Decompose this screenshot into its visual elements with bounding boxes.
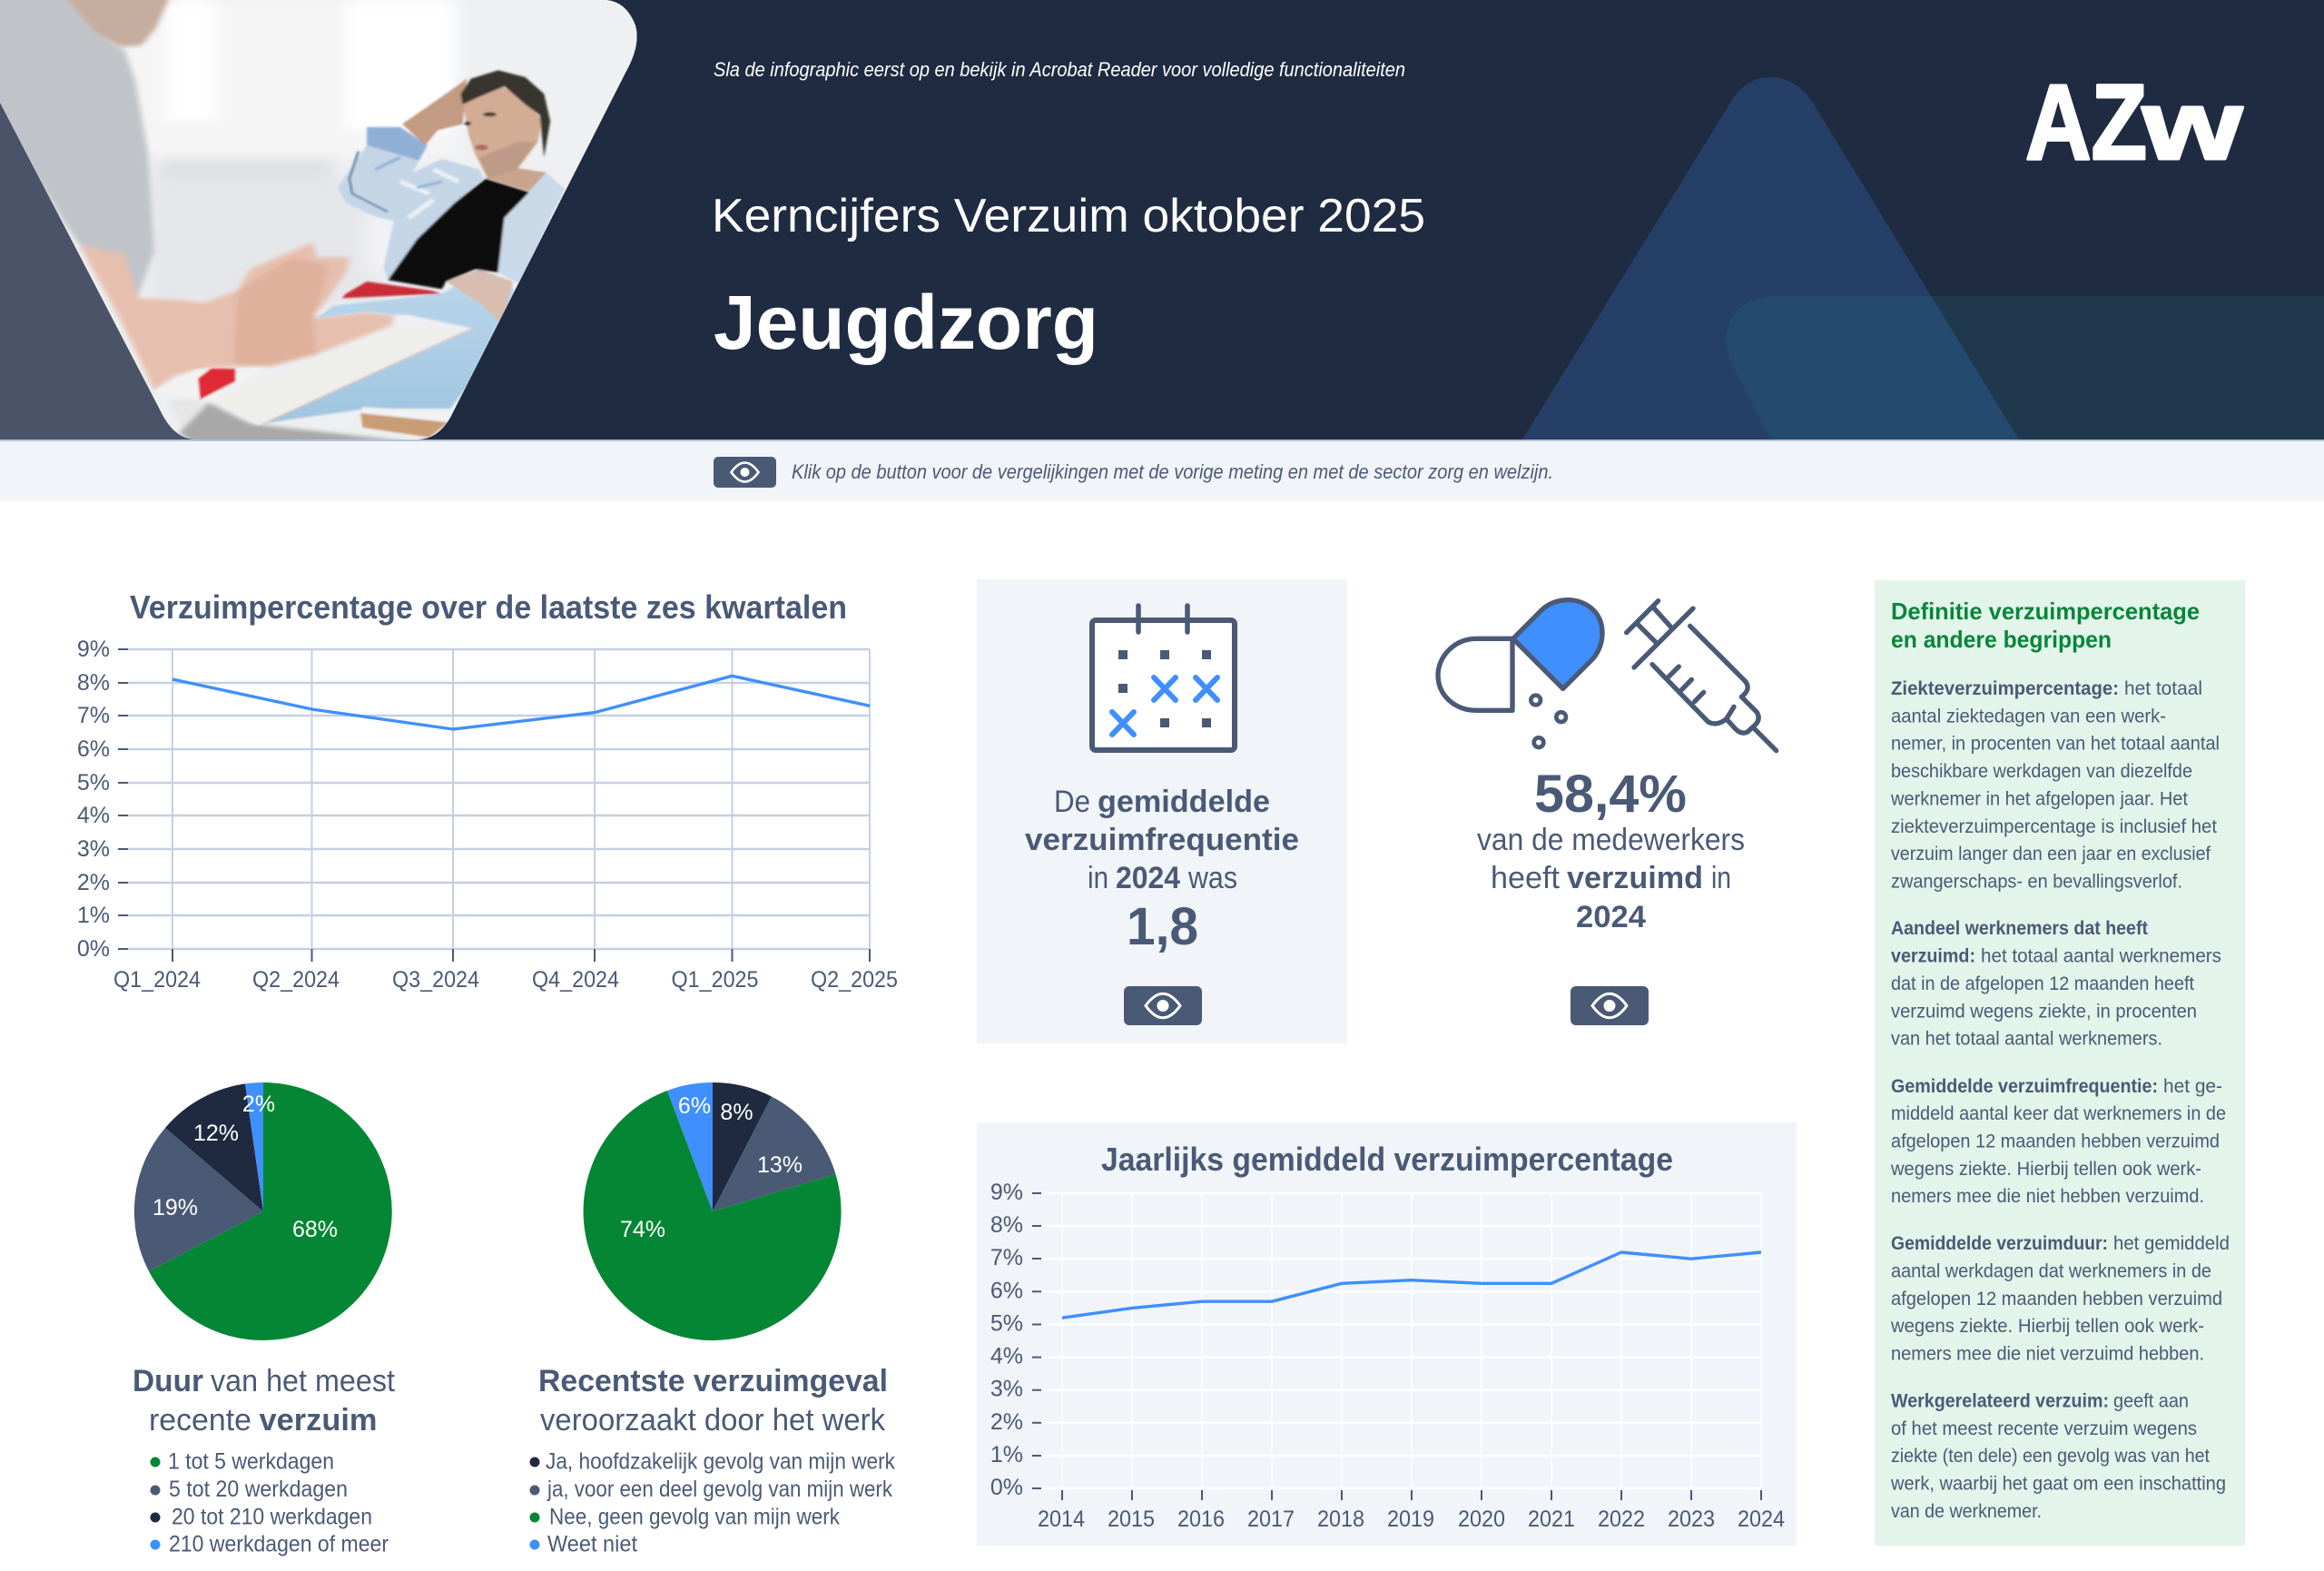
definitions heading: en andere begrippen [1891,626,2112,653]
heading: duration: Duur [133,1364,203,1398]
y axis labels: 1% [990,1442,1023,1467]
x axis labels: 2024 [1738,1507,1785,1532]
pie chart: caused by work: 13% [757,1152,803,1178]
definition: werkgerelateerd verzuim: van de werknemer. [1891,1501,2042,1522]
definition: gemiddelde verzuimduur: het gemiddeld [2113,1233,2230,1254]
logo: w [2142,70,2243,180]
definition: ziekteverzuimpercentage: nemer, in procenten van het totaal aantal [1891,734,2220,755]
definition: gemiddelde verzuimfrequentie: Gemiddelde verzuimfrequentie: [1891,1076,2158,1097]
icon: capsule and syringe [1438,600,1777,751]
pie chart: caused by work [584,1082,842,1340]
y axis labels: 3% [990,1377,1023,1402]
definition: gemiddelde verzuimduur: afgelopen 12 maanden hebben verzuimd [1891,1289,2222,1309]
x axis labels: 2016 [1177,1507,1225,1532]
definition: ziekteverzuimpercentage: ziekteverzuimpercentage is inclusief het [1891,816,2217,837]
definition: aandeel werknemers: verzuimd wegens ziekte, in procenten [1891,1001,2197,1022]
legend: duration: 5 tot 20 werkdagen [169,1477,348,1502]
definition: werkgerelateerd verzuim [1890,1391,2226,1522]
definition: gemiddelde verzuimduur: Gemiddelde verzuimduur: [1891,1233,2108,1254]
definitions heading [1891,598,2200,653]
decorative triangle: blue [1522,77,2019,440]
x axis labels: Q1_2024 [113,967,201,993]
panel: definitions [1875,580,2245,1546]
chart title: Verzuimpercentage over de laatste zes kwartalen [130,588,847,626]
panel: absence frequency [977,579,1347,1043]
x axis labels: 2020 [1458,1507,1505,1532]
notice text: Sla de infographic eerst op en bekijk in Acrobat Reader voor volledige functionaliteiten [714,58,1405,81]
x axis labels: 2022 [1598,1507,1645,1532]
y axis labels [990,1180,1023,1500]
decorative overlap: band over triangle [1727,296,2019,440]
y axis labels: 6% [77,736,110,762]
legend: caused by work: Nee, geen gevolg van mijn werk [549,1504,840,1529]
definition: werkgerelateerd verzuim: of het meest recente verzuim wegens [1891,1418,2197,1439]
frequency text: De [1054,785,1090,819]
pie chart: caused by work: 74% [620,1217,665,1242]
heading: caused by work [538,1364,888,1438]
x axis labels [1038,1507,1785,1532]
heading: duration [133,1364,396,1438]
share text: heeft [1491,861,1561,895]
main title: Jeugdzorg [714,280,1098,365]
y axis labels: 7% [77,703,110,728]
data line [172,676,870,729]
definition: aandeel werknemers: het totaal aantal werknemers [1981,946,2221,967]
definition: gemiddelde verzuimfrequentie: wegens ziekte. Hierbij tellen ook werk- [1890,1159,2201,1180]
logo: AZ [2025,63,2147,183]
y axis labels: 4% [990,1344,1023,1369]
x axis labels: 2015 [1108,1507,1155,1532]
definition: gemiddelde verzuimfrequentie: afgelopen 12 maanden hebben verzuimd [1891,1131,2220,1152]
heading: duration: recente [149,1403,251,1438]
y axis labels: 2% [990,1409,1023,1435]
definition: ziekteverzuimpercentage [1890,678,2220,892]
definition: gemiddelde verzuimduur: nemers mee die niet verzuimd hebben. [1891,1344,2204,1364]
frequency text: gemiddelde [1098,785,1270,819]
pie chart: duration of most recent absence: 12% [193,1121,239,1146]
definition: ziekteverzuimpercentage: aantal ziektedagen van een werk- [1891,706,2166,726]
frequency text [1025,785,1299,895]
value: 58,4%: 58,4% [1534,765,1687,824]
x axis labels: Q4_2024 [532,967,619,993]
definition: aandeel werknemers: verzuimd: [1891,946,1975,967]
instruction strip [0,440,2324,501]
share text: 2024 [1576,900,1646,934]
y axis labels: 4% [77,803,110,828]
definition: ziekteverzuimpercentage: zwangerschaps- en bevallingsverlof. [1891,872,2182,892]
pie chart: duration of most recent absence: 68% [292,1217,338,1242]
definition: aandeel werknemers [1891,918,2221,1050]
share text: van de medewerkers [1477,823,1745,857]
y axis labels: 0% [77,936,110,962]
subtitle: Kerncijfers Verzuim oktober 2025 [712,190,1425,242]
frequency text: verzuimfrequentie [1025,823,1299,857]
header banner [0,0,2324,445]
definition: ziekteverzuimpercentage: werknemer in het afgelopen jaar. Het [1890,788,2188,809]
icon: calendar [1092,606,1235,750]
y axis labels: 1% [77,903,110,928]
definition: ziekteverzuimpercentage: verzuim langer dan een jaar en exclusief [1891,844,2211,865]
x axis labels: 2014 [1038,1507,1085,1532]
x axis labels: 2017 [1247,1507,1295,1532]
definition: ziekteverzuimpercentage: beschikbare werkdagen van diezelfde [1891,761,2192,782]
definition: gemiddelde verzuimfrequentie: middeld aantal keer dat werknemers in de [1891,1103,2226,1124]
instruction text: Klik op de button voor de vergelijkingen met de vorige meting en met de sector zorg en welzijn. [792,460,1553,483]
y axis labels: 6% [990,1279,1023,1304]
pie chart: caused by work: 6% [678,1093,711,1119]
legend: duration: 20 tot 210 werkdagen [172,1504,372,1529]
y axis labels: 8% [990,1212,1023,1238]
legend: caused by work: Ja, hoofdzakelijk gevolg van mijn werk [546,1449,895,1475]
definition: werkgerelateerd verzuim: ziekte (ten dele) een gevolg was van het [1891,1446,2210,1467]
legend: caused by work: ja, voor een deel gevolg van mijn werk [547,1477,892,1502]
legend: caused by work [530,1449,895,1556]
definition: werkgerelateerd verzuim: werk, waarbij het gaat om een inschatting [1890,1474,2226,1495]
line chart: quarterly absence [77,588,898,993]
definition: gemiddelde verzuimfrequentie [1890,1076,2226,1207]
y axis labels: 3% [77,836,110,862]
definition: gemiddelde verzuimduur: aantal werkdagen dat werknemers in de [1891,1260,2211,1281]
definition: aandeel werknemers: van het totaal aantal werknemers. [1891,1029,2162,1050]
chart title: Jaarlijks gemiddeld verzuimpercentage [1101,1141,1673,1178]
logo [2025,63,2243,183]
definition: werkgerelateerd verzuim: geeft aan [2113,1391,2189,1412]
definition: ziekteverzuimpercentage: het totaal [2124,678,2202,699]
x axis labels: Q3_2024 [392,967,479,993]
data line [1062,1252,1761,1318]
y axis labels: 5% [77,770,110,795]
heading: duration: verzuim [260,1403,378,1438]
x axis labels: Q2_2024 [252,967,340,993]
definition: aandeel werknemers: Aandeel werknemers dat heeft [1891,918,2148,939]
heading: caused by work: Recentste verzuimgeval [538,1364,888,1398]
button: eye [1124,986,1202,1025]
panel: share of employees absent [1438,600,1777,1025]
definition: gemiddelde verzuimfrequentie: het ge- [2163,1076,2222,1097]
y axis labels: 5% [990,1311,1023,1337]
x axis labels: 2021 [1528,1507,1575,1532]
frequency text: was [1187,861,1237,895]
y axis labels [77,637,110,962]
x axis labels: Q1_2025 [672,967,759,993]
definition: werkgerelateerd verzuim: Werkgerelateerd verzuim: [1891,1391,2109,1412]
frequency text: 2024 [1116,861,1180,895]
button: eye [714,457,776,488]
y axis labels: 0% [990,1475,1023,1500]
legend: duration: 1 tot 5 werkdagen [168,1449,334,1475]
photo: therapist and young client [0,0,654,445]
x axis labels: Q2_2025 [811,967,898,993]
x axis labels [113,967,898,993]
y axis labels: 9% [77,637,110,662]
pie chart: duration of most recent absence [134,1082,392,1340]
button: eye [1571,986,1649,1025]
definition: gemiddelde verzuimduur: wegens ziekte. Hierbij tellen ook werk- [1890,1316,2204,1337]
definition: gemiddelde verzuimduur [1890,1233,2230,1364]
panel: yearly average line chart [977,1122,1797,1546]
y axis labels: 9% [990,1180,1023,1205]
decorative band: teal [1726,296,2324,440]
y axis labels: 2% [77,870,110,895]
definitions heading: Definitie verzuimpercentage [1891,598,2200,625]
pie chart: duration of most recent absence: 2% [242,1092,275,1117]
y axis labels: 7% [990,1245,1023,1270]
x axis labels: 2023 [1668,1507,1715,1532]
x axis labels: 2018 [1317,1507,1364,1532]
legend: duration: 210 werkdagen of meer [169,1531,389,1556]
value: 1,8: 1,8 [1127,897,1198,956]
x axis labels: 2019 [1387,1507,1434,1532]
pie chart: caused by work: 8% [720,1100,753,1125]
definition: ziekteverzuimpercentage: Ziekteverzuimpercentage: [1891,678,2119,699]
definition: gemiddelde verzuimfrequentie: nemers mee die niet hebben verzuimd. [1891,1186,2204,1207]
y axis labels: 8% [77,670,110,696]
frequency text: in [1088,861,1108,895]
share text: in [1711,861,1731,895]
legend: caused by work: Weet niet [547,1531,637,1556]
heading: caused by work: veroorzaakt door het werk [540,1403,886,1438]
share text: verzuimd [1567,861,1703,895]
heading: duration: van het meest [211,1364,396,1398]
definition: aandeel werknemers: dat in de afgelopen 12 maanden heeft [1891,973,2194,994]
dark wedge left of the photo [0,103,196,440]
share text [1477,823,1745,934]
pie chart: duration of most recent absence: 19% [153,1195,198,1220]
legend: duration [151,1449,389,1556]
